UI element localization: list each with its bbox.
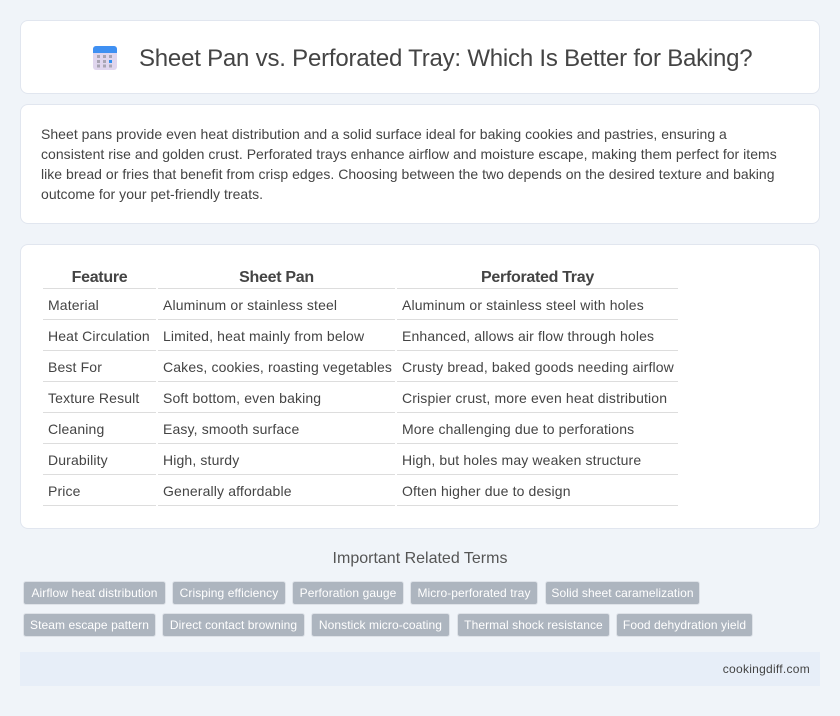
tag: Direct contact browning	[170, 618, 297, 632]
intro paragraph	[41, 126, 777, 202]
tag: Perforation gauge	[300, 586, 396, 600]
tag	[457, 613, 610, 637]
related terms tags	[23, 581, 753, 637]
comparison table: Texture Result	[48, 390, 139, 406]
tag: Airflow heat distribution	[31, 586, 158, 600]
comparison table: Durability	[48, 452, 108, 468]
comparison table: Enhanced, allows air flow through holes	[402, 328, 654, 344]
comparison table panel	[20, 244, 820, 529]
comparison table: Crispier crust, more even heat distribution	[402, 390, 667, 406]
footer source: cookingdiff.com	[723, 662, 810, 676]
comparison table: Cakes, cookies, roasting vegetables	[163, 359, 392, 375]
footer bar	[20, 652, 820, 686]
comparison table: Cleaning	[48, 421, 104, 437]
comparison table: Easy, smooth surface	[163, 421, 299, 437]
tag: Nonstick micro-coating	[319, 618, 442, 632]
tag	[616, 613, 753, 637]
tag	[23, 581, 166, 605]
comparison table: Soft bottom, even baking	[163, 390, 321, 406]
comparison table: Material	[48, 297, 99, 313]
tag	[311, 613, 450, 637]
comparison table: Crusty bread, baked goods needing airflow	[402, 359, 674, 375]
icon: calendar	[93, 46, 117, 70]
comparison table: Often higher due to design	[402, 483, 571, 499]
comparison table: Perforated Tray	[481, 269, 594, 286]
tag	[162, 613, 305, 637]
tag: Micro-perforated tray	[417, 586, 531, 600]
tag	[23, 613, 156, 637]
tag: Food dehydration yield	[623, 618, 746, 632]
tag: Thermal shock resistance	[464, 618, 603, 632]
intro text panel	[20, 104, 820, 224]
tag	[292, 581, 404, 605]
comparison table: More challenging due to perforations	[402, 421, 634, 437]
comparison table	[43, 269, 678, 506]
comparison table: High, sturdy	[163, 452, 239, 468]
comparison table: Best For	[48, 359, 102, 375]
tag	[545, 581, 700, 605]
comparison table: Heat Circulation	[48, 328, 150, 344]
comparison table: High, but holes may weaken structure	[402, 452, 641, 468]
related terms heading: Important Related Terms	[333, 550, 507, 567]
tag: Steam escape pattern	[30, 618, 149, 632]
header panel	[20, 20, 820, 94]
tag: Solid sheet caramelization	[551, 586, 694, 600]
comparison table: Aluminum or stainless steel	[163, 297, 337, 313]
tag	[172, 581, 286, 605]
intro paragraph: Sheet pans provide even heat distribution and a solid surface ideal for baking cookies and pastries, ensuring a	[41, 126, 727, 142]
intro paragraph: like bread or fries that benefit from crisp edges. Choosing between the two depends on the desired texture and baking	[41, 166, 775, 182]
comparison table: Limited, heat mainly from below	[163, 328, 364, 344]
intro paragraph: consistent rise and golden crust. Perforated trays enhance airflow and moisture escape, making them perfect for items	[41, 146, 777, 162]
comparison table: Generally affordable	[163, 483, 292, 499]
title: Sheet Pan vs. Perforated Tray: Which Is Better for Baking?	[139, 45, 752, 72]
tag	[410, 581, 538, 605]
comparison table: Feature	[72, 269, 127, 286]
comparison table: Price	[48, 483, 81, 499]
tag: Crisping efficiency	[180, 586, 278, 600]
comparison table: Sheet Pan	[239, 269, 314, 286]
comparison table: Aluminum or stainless steel with holes	[402, 297, 644, 313]
intro paragraph: outcome for your pet-friendly treats.	[41, 186, 263, 202]
